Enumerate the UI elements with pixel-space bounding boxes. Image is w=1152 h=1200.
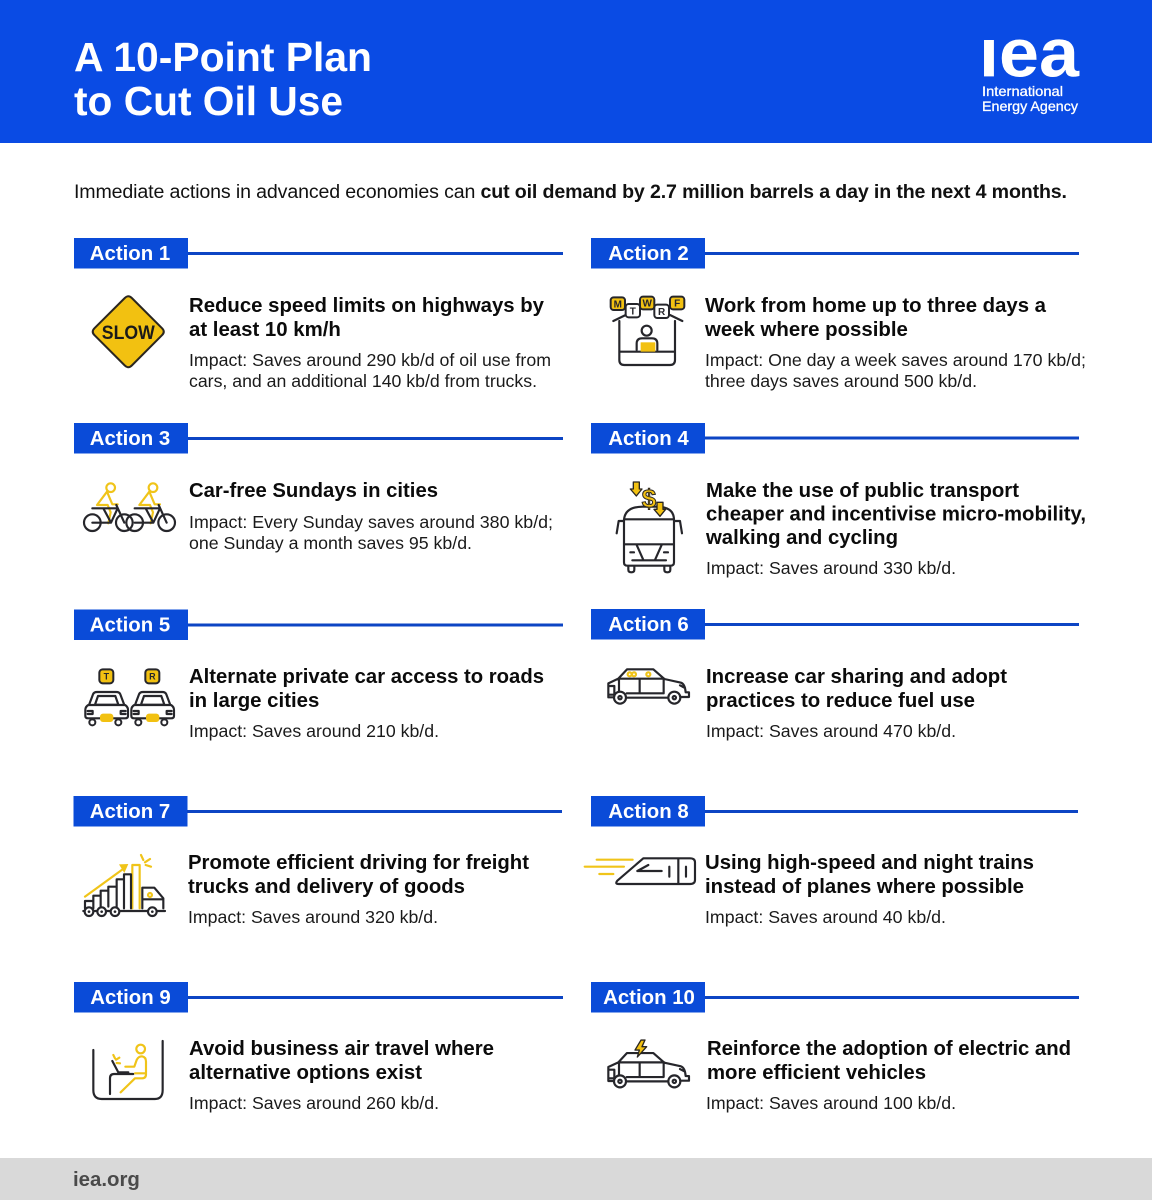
icon: high-speed train: [585, 858, 695, 884]
panel: action 7: [74, 796, 562, 927]
panel: action 2: [591, 238, 1086, 391]
panel: action 2: Action 2: [608, 243, 689, 265]
panel: action 3: one Sunday a month saves 95 kb/d.: [189, 533, 472, 553]
panel: action 1: cars, and an additional 140 kb/d from trucks.: [189, 371, 537, 391]
panel: action 5: in large cities: [189, 690, 319, 712]
icon: work from home: W: [642, 299, 652, 310]
header band: [0, 0, 1152, 143]
panel: action 7: trucks and delivery of goods: [188, 876, 465, 898]
panel: action 6: Increase car sharing and adopt: [706, 666, 1007, 688]
intro text: Immediate actions in advanced economies can cut oil demand by 2.7 million barrels a day in the next 4 months.: [74, 181, 1067, 203]
panel: action 8: instead of planes where possible: [705, 876, 1024, 898]
panel: action 10: Action 10: [603, 987, 695, 1009]
icon: slow sign: [93, 296, 164, 367]
panel: action 7: Impact: Saves around 320 kb/d.: [188, 907, 438, 927]
panel: action 2: Work from home up to three days a: [705, 295, 1047, 317]
panel: action 4: Make the use of public transport: [706, 480, 1019, 502]
icon: alternate cars: R: [149, 672, 156, 682]
icon: cyclists: [84, 483, 175, 531]
panel: action 7: Action 7: [90, 801, 170, 823]
panel: action 4: walking and cycling: [705, 527, 898, 549]
logo: IEA: [983, 39, 1080, 114]
panel: action 1: Reduce speed limits on highways by: [189, 295, 545, 317]
panel: action 7: Promote efficient driving for freight: [188, 852, 529, 874]
panel: action 5: [74, 610, 563, 741]
title: A 10-Point Plan: [74, 34, 372, 80]
icon: work from home: R: [658, 307, 665, 318]
panel: action 9: Avoid business air travel where: [189, 1038, 494, 1060]
panel: action 10: Reinforce the adoption of electric and: [707, 1038, 1071, 1060]
logo: IEA: iea: [979, 14, 1080, 92]
title: [74, 34, 372, 124]
panel: action 6: practices to reduce fuel use: [706, 690, 975, 712]
panel: action 9: alternative options exist: [189, 1062, 422, 1084]
panel: action 10: [591, 982, 1079, 1113]
icon: bus with falling prices: $: [642, 483, 657, 513]
icon: alternate cars: [85, 669, 174, 725]
logo: IEA: Energy Agency: [982, 98, 1078, 114]
panel: action 2: Impact: One day a week saves around 170 kb/d;: [705, 350, 1086, 370]
panel: action 8: Using high-speed and night trains: [705, 852, 1034, 874]
panel: action 6: Action 6: [608, 614, 689, 636]
panel: action 1: [74, 238, 563, 391]
panel: action 3: [74, 423, 563, 553]
icon: alternate cars: T: [104, 672, 110, 682]
panel: action 8: Action 8: [608, 801, 689, 823]
panel: action 6: Impact: Saves around 470 kb/d.: [706, 721, 956, 741]
icon: work from home: T: [630, 306, 636, 317]
footer: iea.org: [73, 1169, 140, 1191]
icon: work from home: [611, 297, 684, 365]
icon: freight truck: [83, 855, 165, 916]
icon: electric car: [608, 1040, 689, 1087]
panel: action 1: Action 1: [90, 243, 170, 265]
panel: action 10: Impact: Saves around 100 kb/d.: [706, 1093, 956, 1113]
panel: action 9: Action 9: [90, 987, 171, 1009]
panel: action 4: cheaper and incentivise micro-mobility,: [706, 504, 1086, 526]
panel: action 3: Car-free Sundays in cities: [189, 480, 438, 502]
panel: action 9: Impact: Saves around 260 kb/d.: [189, 1093, 439, 1113]
panel: action 2: week where possible: [704, 319, 908, 341]
logo: IEA: International: [982, 83, 1063, 99]
panel: action 5: Action 5: [90, 614, 170, 636]
panel: action 3: Action 3: [90, 428, 170, 450]
icon: slow sign: SLOW: [102, 322, 155, 344]
panel: action 4: Action 4: [608, 428, 689, 450]
panel: action 4: [591, 423, 1086, 578]
panel: action 9: [74, 982, 563, 1113]
footer: [0, 1158, 1152, 1200]
panel: action 6: [591, 609, 1079, 741]
panel: action 8: Impact: Saves around 40 kb/d.: [705, 907, 946, 927]
icon: work from home: F: [674, 299, 680, 310]
panel: action 5: Impact: Saves around 210 kb/d.: [189, 721, 439, 741]
panel: action 1: Impact: Saves around 290 kb/d of oil use from: [189, 350, 551, 370]
title: to Cut Oil Use: [74, 78, 343, 124]
icon: remote meeting: [93, 1041, 163, 1099]
panel: action 5: Alternate private car access to roads: [189, 666, 544, 688]
icon: shared car: [608, 669, 689, 704]
panel: action 3: Impact: Every Sunday saves around 380 kb/d;: [189, 512, 553, 532]
icon: work from home: M: [614, 299, 622, 310]
panel: action 2: three days saves around 500 kb/d.: [705, 371, 977, 391]
panel: action 1: at least 10 km/h: [189, 319, 341, 341]
panel: action 8: [585, 796, 1078, 927]
panel: action 4: Impact: Saves around 330 kb/d.: [706, 558, 956, 578]
panel: action 10: more efficient vehicles: [707, 1062, 926, 1084]
icon: bus with falling prices: [617, 482, 682, 572]
